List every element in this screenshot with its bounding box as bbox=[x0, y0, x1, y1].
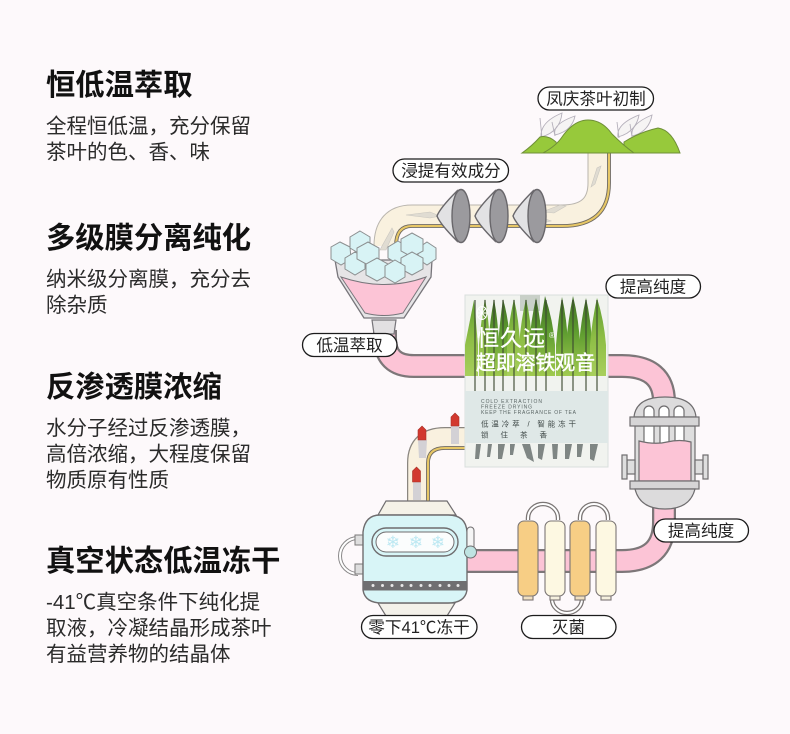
icon: freeze dryer machine: ❄ bbox=[409, 533, 423, 553]
text block: vacuum low temperature freeze drying: -41℃真空条件下纯化提 bbox=[46, 591, 260, 614]
small English and Chinese box text bbox=[481, 399, 577, 440]
pipe: cream freeze-dried pipe with tea bags bbox=[418, 438, 470, 503]
label: increase purity top bbox=[606, 275, 700, 298]
icon: brand emblem on box bbox=[477, 306, 487, 320]
small English and Chinese box text: KEEP THE FRAGRANCE OF TEA bbox=[481, 410, 577, 416]
label: increase purity bottom bbox=[654, 519, 748, 542]
text block: reverse osmosis concentration bbox=[46, 371, 251, 492]
label: sterilization bbox=[522, 616, 616, 638]
text block: multi-stage membrane purification: 纳米级分离膜，充分去 bbox=[46, 268, 251, 291]
small English and Chinese box text: 锁住茶香 bbox=[481, 430, 559, 440]
text block: vacuum low temperature freeze drying: 真空状态低温冻干 bbox=[46, 545, 280, 578]
label: sterilization: 灭菌 bbox=[552, 618, 585, 637]
pipe: pink pipe from vessel through filters to freezer bbox=[460, 505, 664, 561]
text block: multi-stage membrane purification: 除杂质 bbox=[46, 294, 108, 317]
icon: red tea bag tags bbox=[412, 413, 459, 500]
text block: multi-stage membrane purification: 多级膜分离纯化 bbox=[46, 222, 251, 255]
text block: reverse osmosis concentration: 反渗透膜浓缩 bbox=[46, 371, 222, 404]
pipe: cream extraction pipe from mountain to funnel bbox=[380, 153, 609, 250]
brand name on box: 恒久远 bbox=[477, 326, 545, 351]
small English and Chinese box text: COLD EXTRACTION bbox=[481, 399, 542, 405]
icon: reaction vessel bbox=[622, 397, 708, 509]
text block: vacuum low temperature freeze drying bbox=[46, 545, 280, 666]
icon: product box of tea sticks bbox=[465, 295, 608, 467]
dark stems on product box bbox=[475, 300, 597, 391]
ink marks along bottom bbox=[475, 444, 598, 462]
text block: reverse osmosis concentration: 水分子经过反渗透膜， bbox=[46, 417, 251, 440]
grey label band bbox=[465, 391, 608, 443]
icon: product box of tea sticks: ® bbox=[549, 331, 555, 340]
text block: constant low temperature extraction: 恒低温萃取 bbox=[46, 69, 192, 102]
icon: funnel filled with ice cubes bbox=[331, 231, 436, 334]
label: low temperature extraction: 低温萃取 bbox=[316, 336, 383, 355]
label: increase purity bottom: 提高纯度 bbox=[668, 522, 734, 540]
pipe: pink pipe from funnel through product to vessel bbox=[385, 330, 664, 402]
label: low temperature extraction bbox=[302, 334, 397, 356]
label: freeze dry at minus 41 degrees: 零下41℃冻干 bbox=[368, 618, 470, 637]
text block: vacuum low temperature freeze drying: 取液，冷凝结晶形成茶叶 bbox=[46, 617, 272, 640]
label: increase purity top: 提高纯度 bbox=[620, 278, 686, 296]
text block: constant low temperature extraction: 全程恒低温，充分保留 bbox=[46, 115, 251, 138]
text block: constant low temperature extraction bbox=[46, 69, 251, 164]
small English and Chinese box text: 低温冷萃 / 智能冻干 bbox=[481, 418, 576, 428]
icon: green hills with tea leaves bbox=[522, 113, 680, 153]
icon: sterilization filter columns bbox=[518, 504, 616, 613]
icon: three separation membrane cones bbox=[437, 190, 546, 242]
text block: reverse osmosis concentration: 物质原有性质 bbox=[46, 469, 169, 492]
text block: constant low temperature extraction: 茶叶的色、香、味 bbox=[46, 141, 210, 164]
icon: product box of tea sticks: 超即溶铁观音 bbox=[476, 352, 595, 374]
icon: freeze dryer machine: ❄ bbox=[431, 533, 445, 553]
text block: reverse osmosis concentration: 高倍浓缩，大程度保留 bbox=[46, 443, 251, 466]
icon: freeze dryer machine bbox=[340, 501, 476, 616]
label: leach active ingredients: 浸提有效成分 bbox=[401, 162, 501, 180]
icon: freeze dryer machine: ❄ bbox=[386, 533, 400, 553]
leaves on product box bbox=[465, 295, 606, 376]
text block: multi-stage membrane purification bbox=[46, 222, 251, 317]
small English and Chinese box text: FREEZE DRYING bbox=[481, 404, 532, 410]
label: Fengqing tea primary processing: 凤庆茶叶初制 bbox=[546, 90, 646, 108]
text block: vacuum low temperature freeze drying: 有益营养物的结晶体 bbox=[46, 643, 230, 666]
